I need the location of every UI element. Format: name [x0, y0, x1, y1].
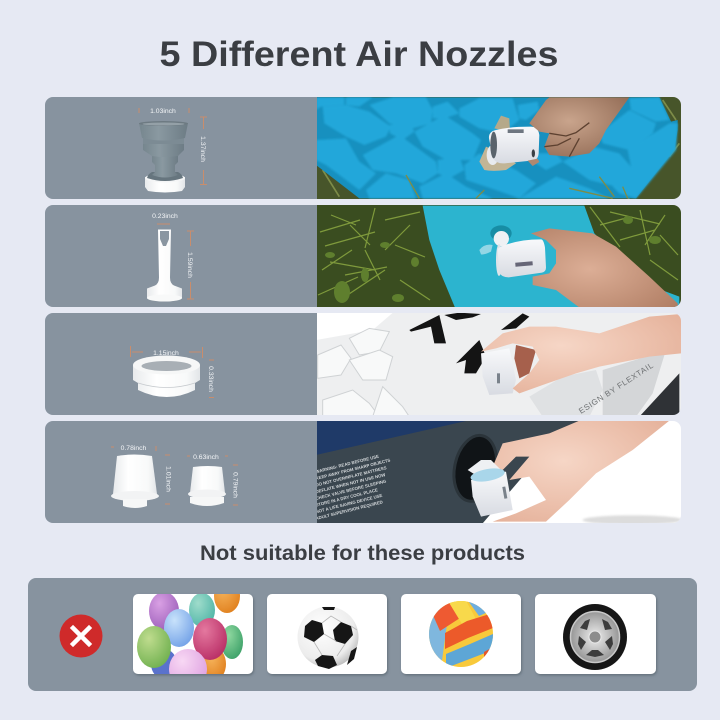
bag lettering [409, 313, 529, 373]
bag printed text: ESIGN BY FLEXTAIL [577, 361, 655, 416]
dimension: 1.15inch: 1.15inch [153, 350, 179, 357]
dimension: 0.33inch: 0.33inch [207, 366, 214, 392]
photo: inflating vacuum bag [316, 310, 681, 417]
mattress printed text block: NOT A LIFE SAVING DEVICE USE [315, 493, 383, 514]
mattress printed text block: WARNING: READ BEFORE USE [315, 454, 380, 474]
dimension: 0.23inch [152, 213, 178, 224]
mattress printed text block [315, 454, 391, 521]
panel: row 1 collapsible nozzle [45, 97, 320, 199]
hand [531, 228, 678, 310]
dark inner fingers [514, 345, 536, 378]
dimension: 0.79inch: 0.79inch [232, 472, 238, 498]
icon: short wide adapter [133, 356, 200, 397]
dimension: 1.03inch [139, 108, 189, 115]
photo: inflating air mattress [315, 421, 683, 525]
row 3 gray background [45, 313, 320, 415]
dimension: 0.63inch [187, 454, 228, 461]
dimension: 1.59inch [186, 231, 194, 299]
pump with blue top [468, 460, 513, 517]
dimension: 0.33inch [207, 360, 214, 398]
hand [529, 97, 629, 157]
hand [481, 314, 681, 393]
mattress printed text block: DO NOT OVERINFLATE MATTRESS [315, 465, 387, 488]
card: tire [535, 594, 656, 674]
dimension: 1.01inch [164, 455, 172, 504]
dimension: 1.59inch: 1.59inch [186, 252, 193, 278]
icon: gray collapsible nozzle [139, 121, 188, 192]
logo mark on pump [497, 373, 500, 383]
icon: slim white nozzle [147, 230, 182, 302]
sleeping pad [316, 97, 678, 198]
panel: row 3 vacuum bag adapter [45, 313, 320, 415]
panel: row 2 narrow nozzle [45, 205, 320, 307]
mattress printed text block: STORE IN A DRY COOL PLACE [315, 487, 378, 508]
mattress printed text block: DEFLATE WHEN NOT IN USE NOW [315, 472, 387, 494]
dimension: 1.37inch: 1.37inch [199, 136, 206, 162]
dimension: 0.78inch [111, 445, 156, 452]
row 2 gray background [45, 205, 320, 307]
card: volleyball [401, 594, 521, 674]
dimension: 0.63inch: 0.63inch [193, 454, 219, 461]
dimension: 1.37inch [199, 117, 207, 184]
pump on valve [479, 116, 539, 171]
teal pillow [423, 206, 679, 310]
row 4 gray background [45, 421, 320, 523]
mattress printed text block: KEEP AWAY FROM SHARP OBJECTS [315, 457, 391, 481]
icon: small white nozzle [188, 466, 226, 506]
dimension: 1.01inch: 1.01inch [164, 466, 172, 492]
row 1 gray background [45, 97, 320, 199]
dimension: 1.03inch: 1.03inch [150, 108, 176, 115]
dimension: 0.79inch [232, 465, 238, 505]
icon: large white nozzle [111, 454, 159, 508]
pump on pillow [479, 231, 546, 277]
panel: row 4 air mattress nozzles [45, 421, 320, 523]
bag wrinkles and dark corner [529, 370, 603, 417]
valve opening [452, 434, 498, 503]
photo: inflating pillow on grass [317, 205, 681, 310]
dimension: 1.15inch [130, 346, 202, 358]
photo: inflating sleeping pad [316, 97, 681, 200]
mattress printed text block: ADULT SUPERVISION REQUIRED [315, 499, 383, 521]
mattress printed text block: CHECK VALVE BEFORE SLEEPING [315, 478, 387, 501]
icon: red prohibited X [60, 614, 102, 658]
pump on bag [481, 348, 516, 395]
bottom panel background [28, 578, 697, 691]
table shadow [582, 514, 680, 523]
subtitle: Not suitable for these products [200, 542, 525, 565]
card: soccer ball [267, 594, 387, 674]
card: balloons [133, 594, 255, 676]
hand [493, 421, 669, 522]
dimension: 0.23inch: 0.23inch [152, 213, 178, 220]
dimension: 0.78inch: 0.78inch [121, 445, 147, 452]
title: 5 Different Air Nozzles [160, 35, 558, 74]
panel: unsuitable products [28, 578, 697, 691]
